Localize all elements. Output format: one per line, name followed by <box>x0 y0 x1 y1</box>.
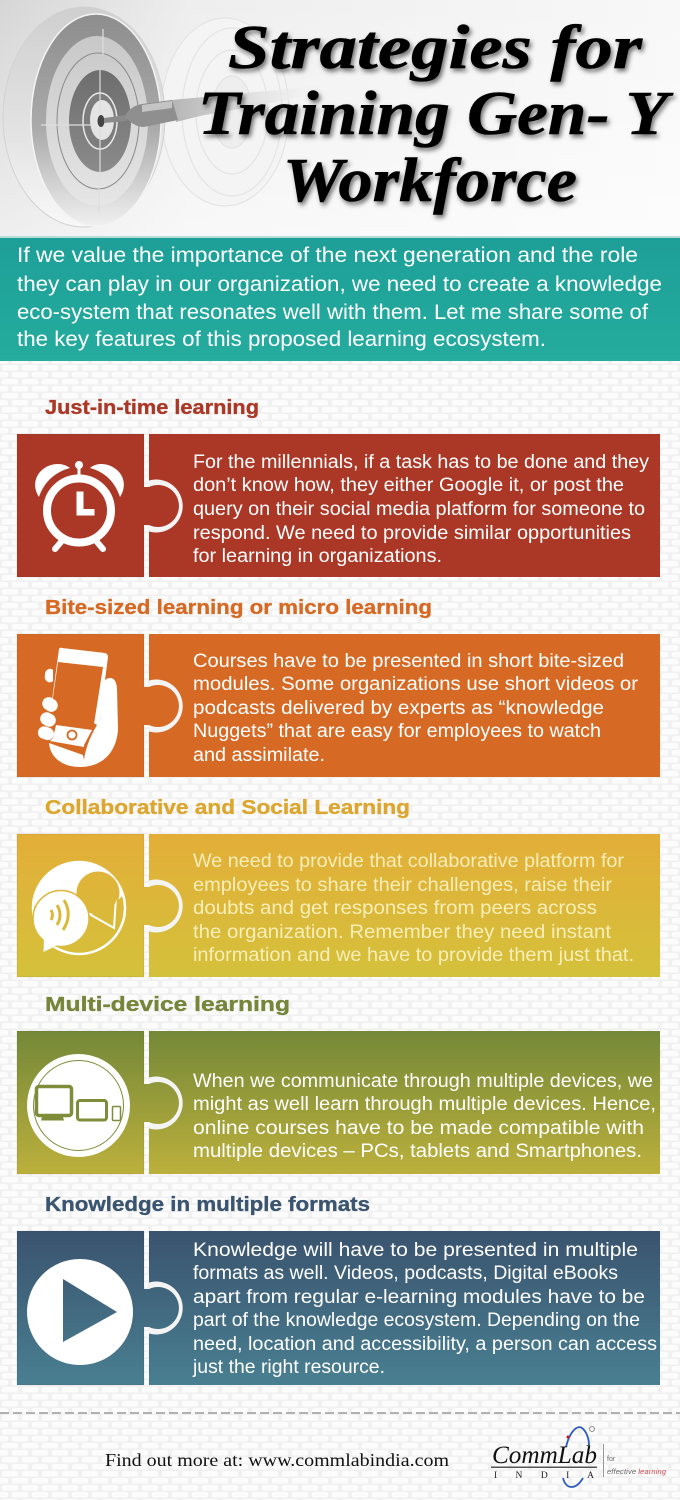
body text: might as well learn through multiple devices. Hence, <box>193 1093 656 1115</box>
panel: just-in-time learning <box>17 396 660 577</box>
title: Workforce <box>283 147 577 215</box>
panel: knowledge in multiple formats <box>17 1193 660 1385</box>
icon block <box>17 434 144 577</box>
body text: information and we have to provide them just that. <box>193 944 634 966</box>
heading: Multi-device learning <box>45 993 290 1016</box>
panel: bite-sized learning <box>17 596 660 777</box>
body text <box>192 1239 657 1378</box>
body text <box>193 650 638 766</box>
puzzle knob <box>143 1282 183 1334</box>
body text: for learning in organizations. <box>193 545 442 567</box>
body text: query on their social media platform for someone to <box>193 498 645 520</box>
dart <box>104 84 340 127</box>
title: Strategies for <box>228 14 643 82</box>
heading: Collaborative and Social Learning <box>45 796 410 819</box>
icon: alarm clock <box>35 461 124 549</box>
body text: and assimilate. <box>193 744 325 766</box>
body text: part of the knowledge ecosystem. Depending on the <box>193 1309 640 1331</box>
logo: CommLab India: CommLab <box>492 1442 597 1469</box>
body text: employees to share their challenges, raise their <box>193 874 612 896</box>
intro text: the key features of this proposed learning ecosystem. <box>17 326 546 351</box>
ghost target <box>161 18 289 206</box>
body text: For the millennials, if a task has to be done and they <box>193 451 649 473</box>
heading: Just-in-time learning <box>45 396 259 419</box>
intro text: eco-system that resonates well with them. Let me share some of <box>17 299 649 324</box>
body text: respond. We need to provide similar opportunities <box>193 522 631 544</box>
body text: formats as well. Videos, podcasts, Digital eBooks <box>193 1262 618 1284</box>
panel: multi-device learning <box>17 993 660 1174</box>
body text: Knowledge will have to be presented in multiple <box>193 1239 638 1261</box>
icon block <box>17 1031 144 1174</box>
dart target <box>3 7 165 227</box>
intro band <box>0 236 680 361</box>
body text: multiple devices – PCs, tablets and Smartphones. <box>193 1140 642 1162</box>
body text: just the right resource. <box>192 1356 385 1378</box>
title: Training Gen- Y <box>198 80 674 148</box>
body text <box>193 451 649 567</box>
footer call to action: Find out more at: www.commlabindia.com <box>105 1450 449 1470</box>
body text: doubts and get responses from peers across <box>193 897 597 919</box>
text block background <box>149 634 660 777</box>
intro text: they can play in our organization, we need to create a knowledge <box>17 271 662 296</box>
icon block <box>17 834 144 977</box>
body text: We need to provide that collaborative platform for <box>193 850 624 872</box>
body text: When we communicate through multiple devices, we <box>193 1070 653 1092</box>
body text: the organization. Remember they need instant <box>193 921 612 943</box>
icon block <box>17 634 144 777</box>
body text: modules. Some organizations use short videos or <box>193 673 638 695</box>
logo: CommLab India <box>491 1426 667 1487</box>
puzzle knob <box>143 480 183 532</box>
heading: Bite-sized learning or micro learning <box>45 596 432 619</box>
text block background <box>149 434 660 577</box>
body text: podcasts delivered by experts as “knowledge <box>193 697 604 719</box>
icon: multiple devices <box>27 1054 130 1157</box>
icon: hand holding phone <box>36 648 118 767</box>
icon: play button <box>27 1259 133 1365</box>
body text: Nuggets” that are easy for employees to watch <box>193 720 601 742</box>
puzzle knob <box>143 1076 183 1130</box>
puzzle knob <box>143 680 183 732</box>
body text: need, location and accessibility, a person can access <box>193 1333 657 1355</box>
intro text <box>17 242 662 351</box>
icon: speech bubbles <box>32 862 125 954</box>
body text <box>193 1070 656 1162</box>
panel: collaborative and social learning <box>17 796 660 977</box>
title <box>198 14 674 215</box>
text block background <box>149 1031 660 1174</box>
puzzle knob <box>143 880 183 932</box>
body text: apart from regular e-learning modules have to be <box>193 1286 645 1308</box>
header banner <box>0 0 680 236</box>
logo: CommLab India: I N D I A <box>494 1471 594 1481</box>
logo: CommLab India: effective learning <box>607 1467 667 1476</box>
body text: don’t know how, they either Google it, or post the <box>193 474 624 496</box>
text block background <box>149 834 660 977</box>
heading: Knowledge in multiple formats <box>45 1193 370 1216</box>
body text: Courses have to be presented in short bite-sized <box>193 650 624 672</box>
intro text: If we value the importance of the next generation and the role <box>17 242 638 267</box>
icon block <box>17 1231 144 1385</box>
body text <box>193 850 634 966</box>
text block background <box>149 1231 660 1385</box>
body text: online courses have to be made compatible with <box>193 1117 644 1139</box>
logo: CommLab India: for <box>607 1456 616 1463</box>
